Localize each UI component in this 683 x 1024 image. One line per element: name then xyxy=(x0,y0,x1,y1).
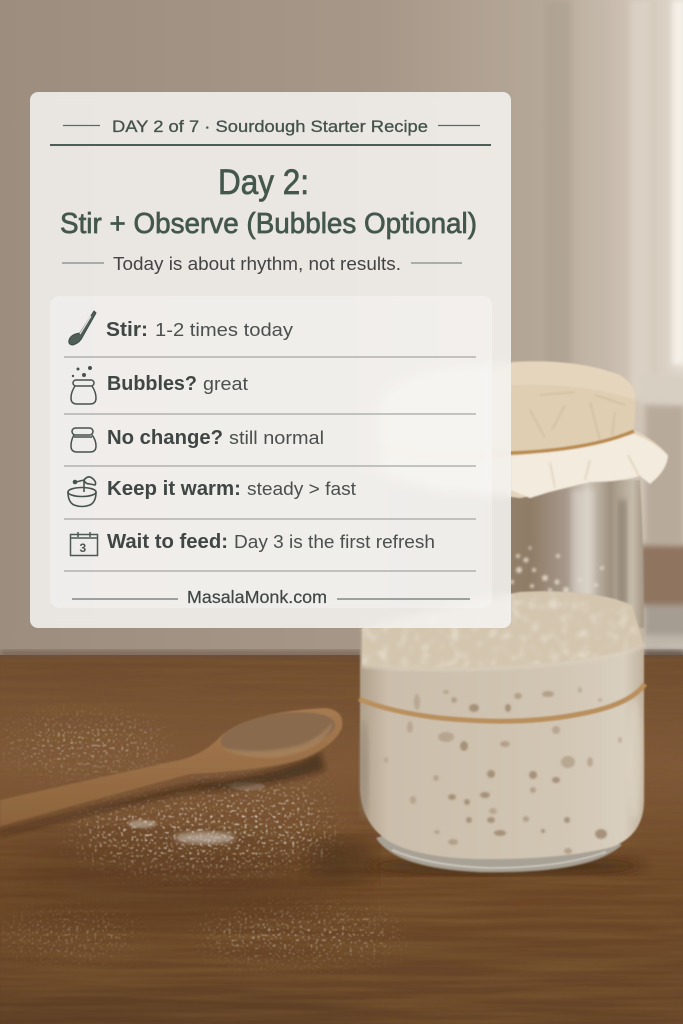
row: no change: No change? xyxy=(107,427,223,449)
icon: jar with bubbles xyxy=(71,366,96,404)
rubber band on jar xyxy=(359,684,645,721)
window and curtain xyxy=(545,0,683,545)
row: keep warm: steady > fast xyxy=(247,478,356,499)
row: no change xyxy=(71,427,324,452)
row: keep warm xyxy=(68,477,356,506)
icon: calendar: 3 xyxy=(80,541,86,555)
glass body xyxy=(360,480,644,640)
row: no change: still normal xyxy=(229,428,324,448)
icon: spoon xyxy=(69,311,96,345)
starter xyxy=(360,628,644,859)
main frosted card xyxy=(30,92,511,628)
row: wait to feed: Wait to feed: xyxy=(107,531,228,553)
wooden spoon xyxy=(0,705,342,836)
row: stir: 1-2 times today xyxy=(155,319,294,340)
row: keep warm: Keep it warm: xyxy=(107,478,241,500)
row: stir: Stir: xyxy=(106,319,148,341)
icon: calendar xyxy=(70,532,98,556)
icon: bowl with steam xyxy=(68,477,96,506)
shelf objects at right xyxy=(640,545,683,726)
footer: website: MasalaMonk.com xyxy=(187,587,327,607)
tagline: Today is about rhythm, not results. xyxy=(113,253,401,274)
flour dusting xyxy=(2,708,407,972)
wall xyxy=(0,0,683,660)
row: bubbles xyxy=(71,366,248,404)
title xyxy=(60,163,477,240)
foam top xyxy=(362,591,644,668)
title: Day 2: xyxy=(218,163,309,202)
wooden table xyxy=(0,650,683,1024)
icon: jar xyxy=(71,428,96,452)
row: wait to feed: Day 3 is the first refresh xyxy=(234,531,435,552)
inner list panel xyxy=(50,296,492,608)
flour specks on glass xyxy=(510,546,604,593)
title: Stir + Observe (Bubbles Optional) xyxy=(60,208,477,240)
row: bubbles: Bubbles? xyxy=(107,373,197,395)
eyebrow: day label: DAY 2 of 7 · Sourdough Starter Recipe xyxy=(112,117,428,136)
bubbles xyxy=(384,687,622,854)
jar shadow xyxy=(365,857,645,875)
row: bubbles: great xyxy=(203,373,248,394)
cloth lid xyxy=(380,363,668,498)
row: stir xyxy=(69,311,294,345)
jar with starter and cloth lid xyxy=(359,361,668,875)
glass base xyxy=(376,835,622,872)
rubber band on lid xyxy=(380,431,634,455)
row: wait to feed xyxy=(70,531,435,556)
